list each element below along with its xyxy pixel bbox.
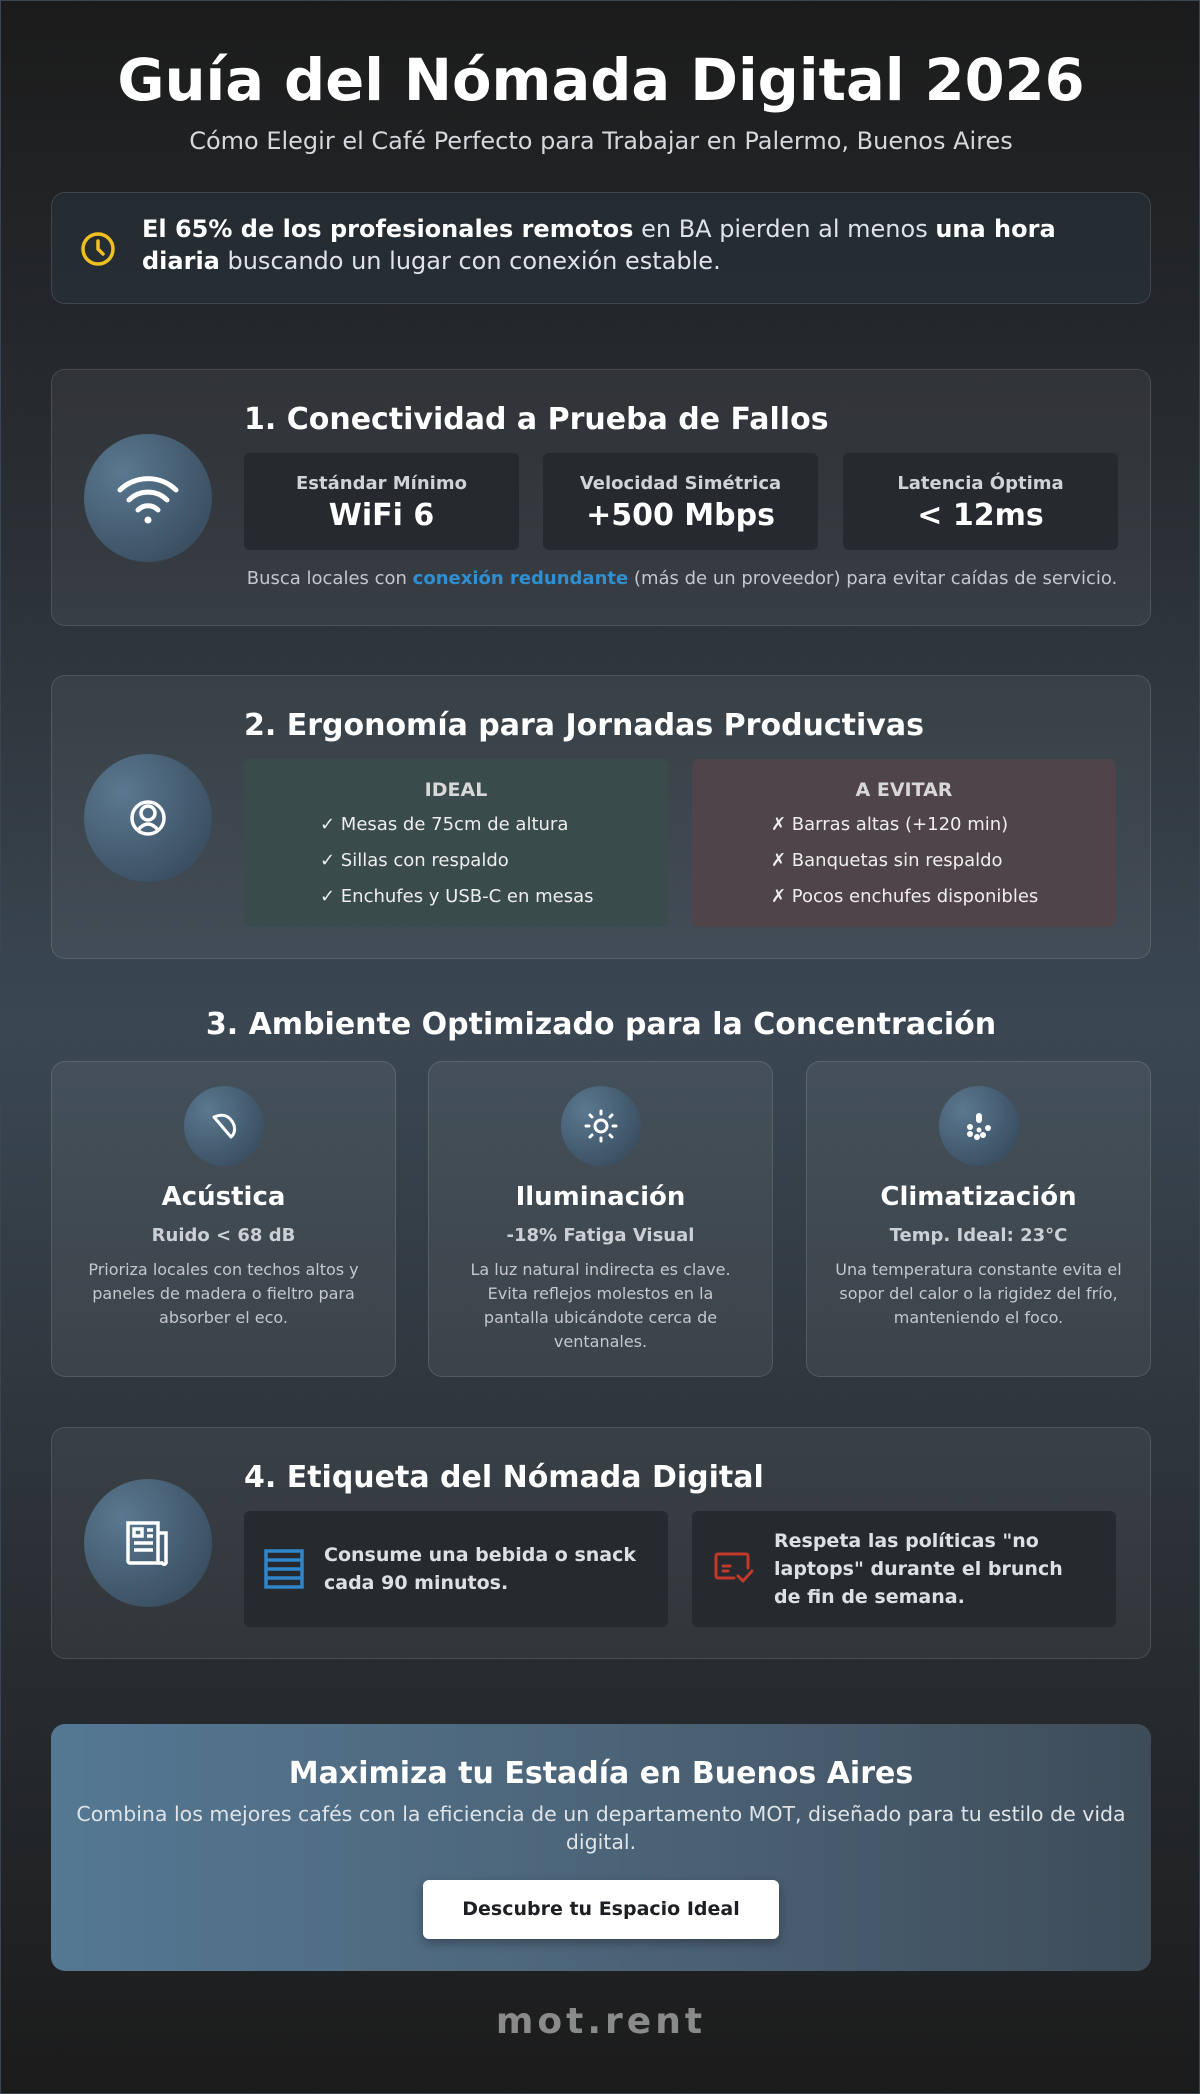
panel: etiqueta — [51, 1427, 1151, 1659]
subtitle: Cómo Elegir el Café Perfecto para Trabajar en Palermo, Buenos Aires — [189, 127, 1013, 155]
panel: ergonomia — [51, 675, 1151, 959]
list: ideal: ✓ Mesas de 75cm de altura — [320, 814, 568, 835]
stat: speed — [543, 453, 818, 550]
card: climatizacion: Climatización — [880, 1182, 1077, 1212]
list: ideal: IDEAL — [425, 779, 487, 801]
rule: no laptops: Respeta las políticas "no laptops" durante el brunch de fin de semana. — [774, 1530, 1063, 1608]
rule: consume: Consume una bebida o snack cada 90 minutos. — [324, 1544, 636, 1594]
heading 3: 3. Ambiente Optimizado para la Concentración — [206, 1007, 996, 1042]
list: ideal — [244, 759, 668, 927]
list: avoid — [692, 759, 1116, 927]
list: avoid: ✗ Banquetas sin respaldo — [771, 850, 1003, 871]
card: climatizacion: Una temperatura constante evita el sopor del calor o la rigidez del frío, manteniendo el foco. — [835, 1260, 1122, 1327]
icon: newspaper — [84, 1479, 212, 1607]
stat: speed: Velocidad Simétrica — [580, 473, 781, 494]
stat: wifi: Estándar Mínimo — [296, 473, 467, 494]
rule: no laptops — [692, 1511, 1116, 1627]
card: acustica: Ruido < 68 dB — [152, 1225, 295, 1246]
card: iluminacion — [428, 1061, 773, 1377]
list: avoid: A EVITAR — [856, 779, 952, 801]
stat: latency — [843, 453, 1118, 550]
list: avoid: ✗ Pocos enchufes disponibles — [771, 886, 1038, 907]
title: Guía del Nómada Digital 2026 — [117, 47, 1085, 114]
CTA title: Maximiza tu Estadía en Buenos Aires — [289, 1756, 913, 1791]
list: ideal: ✓ Enchufes y USB-C en mesas — [320, 886, 594, 907]
stat: wifi: WiFi 6 — [329, 498, 434, 533]
stat: speed: +500 Mbps — [586, 498, 775, 533]
CTA button: Descubre tu Espacio Ideal — [462, 1898, 740, 1920]
callout text: El 65% de los profesionales remotos en BA pierden al menos una hora diaria buscando un lugar con conexión estable. — [142, 215, 1056, 275]
stat: wifi — [244, 453, 519, 550]
card: iluminacion: Iluminación — [516, 1182, 685, 1212]
footer logo: mot.rent — [496, 2001, 706, 2042]
CTA button — [423, 1880, 779, 1939]
icon: clock — [81, 232, 115, 266]
stat: latency: < 12ms — [917, 498, 1044, 533]
stat: latency: Latencia Óptima — [897, 473, 1064, 494]
heading 2: 2. Ergonomía para Jornadas Productivas — [244, 708, 924, 743]
callout: stat — [51, 192, 1151, 304]
icon: person — [84, 754, 212, 882]
note: Busca locales con conexión redundante (más de un proveedor) para evitar caídas de servicio. — [247, 568, 1117, 589]
card: iluminacion: La luz natural indirecta es clave. Evita reflejos molestos en la pantalla ubicándote cerca de ventanales. — [470, 1260, 731, 1351]
CTA text: Combina los mejores cafés con la eficiencia de un departamento MOT, diseñado para tu estilo de vida digital. — [76, 1802, 1126, 1854]
panel: conectividad — [51, 369, 1151, 626]
card: acustica: Acústica — [162, 1182, 285, 1212]
icon: wifi — [84, 434, 212, 562]
card: acustica — [51, 1061, 396, 1377]
card: climatizacion — [806, 1061, 1151, 1377]
card: iluminacion: -18% Fatiga Visual — [507, 1225, 694, 1246]
rule: consume — [244, 1511, 668, 1627]
card: climatizacion: Temp. Ideal: 23°C — [890, 1225, 1067, 1246]
list: ideal: ✓ Sillas con respaldo — [320, 850, 509, 871]
list: avoid: ✗ Barras altas (+120 min) — [771, 814, 1008, 835]
CTA panel — [51, 1724, 1151, 1971]
card: acustica: Prioriza locales con techos altos y paneles de madera o fieltro para absorber el eco. — [88, 1260, 359, 1327]
heading 1: 1. Conectividad a Prueba de Fallos — [244, 402, 829, 437]
heading 4: 4. Etiqueta del Nómada Digital — [244, 1460, 764, 1495]
